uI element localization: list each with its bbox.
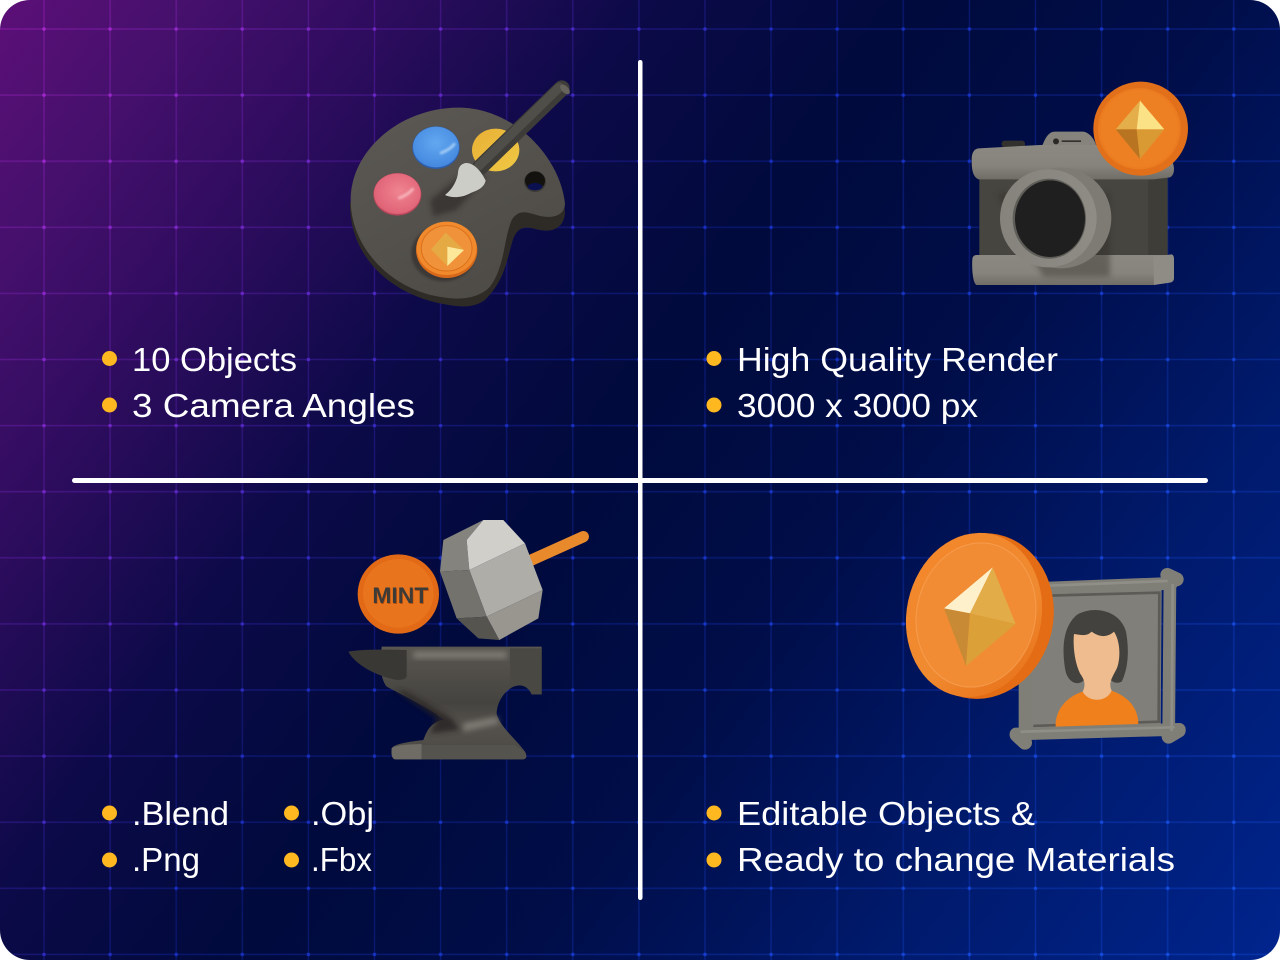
- brush tip: [445, 163, 486, 197]
- bullet list: formats: .Fbx: [311, 841, 372, 878]
- bullet list: formats: .Obj: [311, 795, 374, 832]
- panel: render quality: [706, 82, 1188, 424]
- anvil: [348, 647, 542, 759]
- coin on frame: [891, 519, 1069, 713]
- bullet list: materials: [706, 795, 1175, 878]
- portrait: hair: [1064, 610, 1128, 683]
- panel: objects and angles: [102, 83, 572, 424]
- portrait: face: [1074, 632, 1119, 700]
- hammer head: [440, 520, 543, 640]
- coin on camera: [1093, 82, 1188, 176]
- bullet list: formats: .Blend: [132, 795, 229, 832]
- icon: camera with coin: [972, 82, 1188, 285]
- coin: mint: [358, 554, 439, 634]
- hammer handle: [530, 537, 583, 561]
- bullet list: render: [706, 341, 1058, 424]
- bullet list: objects: 10 Objects: [132, 341, 297, 378]
- icon: paint palette: [350, 83, 572, 306]
- bullet list: materials: Ready to change Materials: [737, 841, 1175, 878]
- portrait frame: [1016, 575, 1179, 743]
- icon: portrait frame with coin: [891, 519, 1179, 743]
- portrait: shoulders: [1056, 691, 1138, 727]
- bullet list: objects: 3 Camera Angles: [132, 387, 415, 424]
- coin: mint: MINT: [373, 584, 430, 609]
- coin: mint: MINT: [372, 583, 429, 608]
- bullet list: render: High Quality Render: [737, 341, 1058, 378]
- brush handle: [479, 83, 572, 167]
- bullet list: render: 3000 x 3000 px: [737, 387, 979, 424]
- panel: file formats: [102, 520, 583, 878]
- vertical divider: [638, 60, 642, 900]
- bullet list: materials: Editable Objects &: [737, 795, 1035, 832]
- icon: hammer, coin and anvil: [348, 520, 583, 759]
- bullet list: formats: [102, 795, 374, 878]
- bullet list: objects: [102, 341, 415, 424]
- horizontal divider: [72, 478, 1208, 483]
- panel: editable materials: [706, 519, 1179, 878]
- camera lens: [1000, 168, 1111, 268]
- bullet list: formats: .Png: [132, 841, 200, 878]
